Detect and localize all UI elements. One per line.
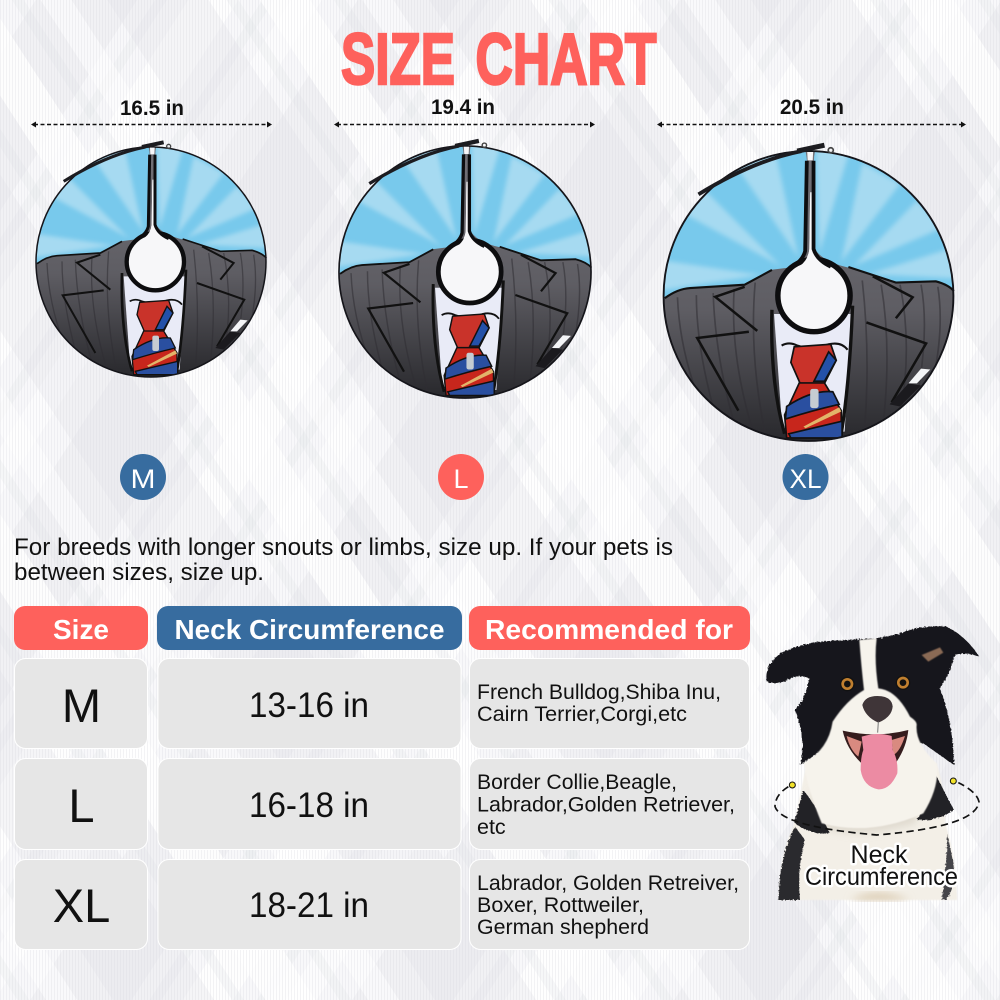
dimension: extra large width	[657, 96, 966, 128]
row M: Cairn Terrier,Corgi,etc	[477, 702, 687, 726]
sizing note	[14, 534, 673, 586]
table header: Size: Size	[53, 614, 109, 645]
collar: size XL	[652, 138, 963, 441]
row L: Border Collie,Beagle,	[477, 770, 677, 794]
row XL: Labrador, Golden Retreiver,	[477, 871, 739, 895]
row XL: German shepherd	[477, 915, 649, 939]
collar: size L	[329, 134, 599, 398]
neck circumference label	[805, 841, 958, 891]
title	[341, 20, 657, 100]
dimension: large width: 19.4 in	[431, 96, 495, 119]
row XL: Boxer, Rottweiler,	[477, 893, 644, 917]
badge: L: L	[454, 464, 468, 494]
sizing note: For breeds with longer snouts or limbs, size up. If your pets is	[14, 534, 673, 561]
neck circumference label: Neck	[851, 841, 908, 869]
table header: Recommended for: Recommended for	[485, 614, 733, 645]
collar: size M	[27, 136, 274, 377]
title: SIZE	[341, 20, 455, 100]
dimension: extra large width: 20.5 in	[780, 96, 844, 119]
row L: 16-18 in	[249, 786, 369, 825]
dimension: medium width: 16.5 in	[120, 97, 184, 120]
row M: 13-16 in	[249, 686, 369, 725]
row L: etc	[477, 815, 506, 839]
sizing note: between sizes, size up.	[14, 559, 264, 586]
row XL: XL	[53, 879, 110, 932]
table header: Neck Circumference	[157, 606, 462, 650]
row M	[14, 658, 750, 748]
row XL	[14, 860, 750, 950]
table header: Size	[14, 606, 148, 650]
badge: M	[120, 454, 166, 500]
row M: French Bulldog,Shiba Inu,	[477, 680, 721, 704]
row XL: 18-21 in	[249, 886, 369, 925]
badge: XL	[782, 454, 828, 500]
table header: Neck Circumference: Neck Circumference	[174, 614, 444, 645]
dimension: medium width	[31, 97, 272, 128]
neck circumference label: Circumference	[805, 863, 958, 891]
badge: L	[438, 454, 484, 500]
illustration: dog with neck measure	[766, 626, 979, 900]
table header: Recommended for	[469, 606, 750, 650]
dimension: large width	[334, 96, 595, 128]
row L: L	[68, 779, 95, 832]
row L	[14, 758, 750, 850]
row M: M	[62, 679, 101, 732]
badge: M: M	[130, 464, 156, 494]
badge: XL: XL	[790, 464, 822, 494]
row L: Labrador,Golden Retriever,	[477, 792, 735, 816]
title: CHART	[476, 20, 657, 100]
